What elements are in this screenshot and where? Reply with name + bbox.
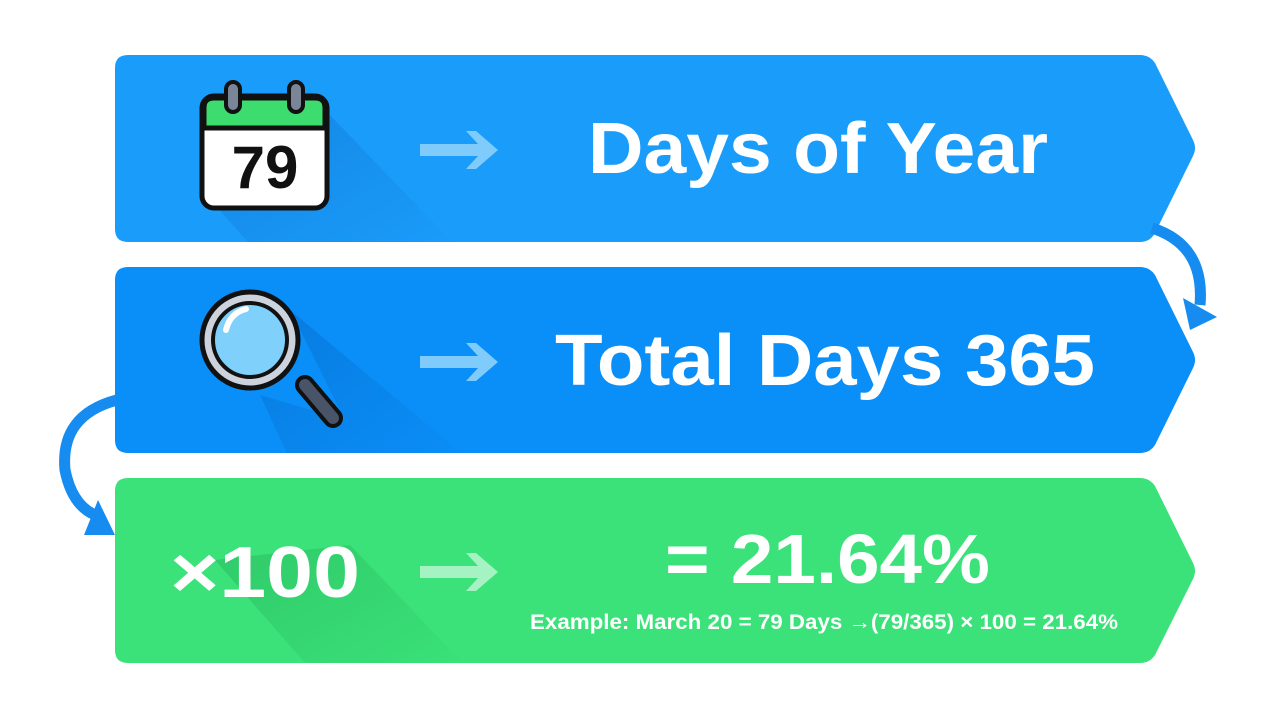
text: example: Example: March 20 = 79 Days →(79/365) × 100 = 21.64% [530, 611, 1118, 634]
arrow [420, 553, 498, 591]
arrow: curved right [1152, 228, 1217, 330]
arrow: curved left [65, 400, 117, 535]
panel: days of year [115, 55, 1195, 250]
arrow [420, 131, 498, 169]
heading: result: = 21.64% [665, 520, 990, 598]
arrow [420, 343, 498, 381]
text: x100: ×100 [170, 533, 360, 613]
heading: Total Days 365: Total Days 365 [555, 321, 1095, 401]
icon: calendar [202, 82, 327, 208]
icon: calendar: 79 [232, 134, 298, 201]
heading: Days of Year: Days of Year [588, 109, 1048, 189]
panel: result [115, 478, 1195, 680]
panel: total days [115, 267, 1195, 460]
icon: magnifier [202, 292, 333, 418]
